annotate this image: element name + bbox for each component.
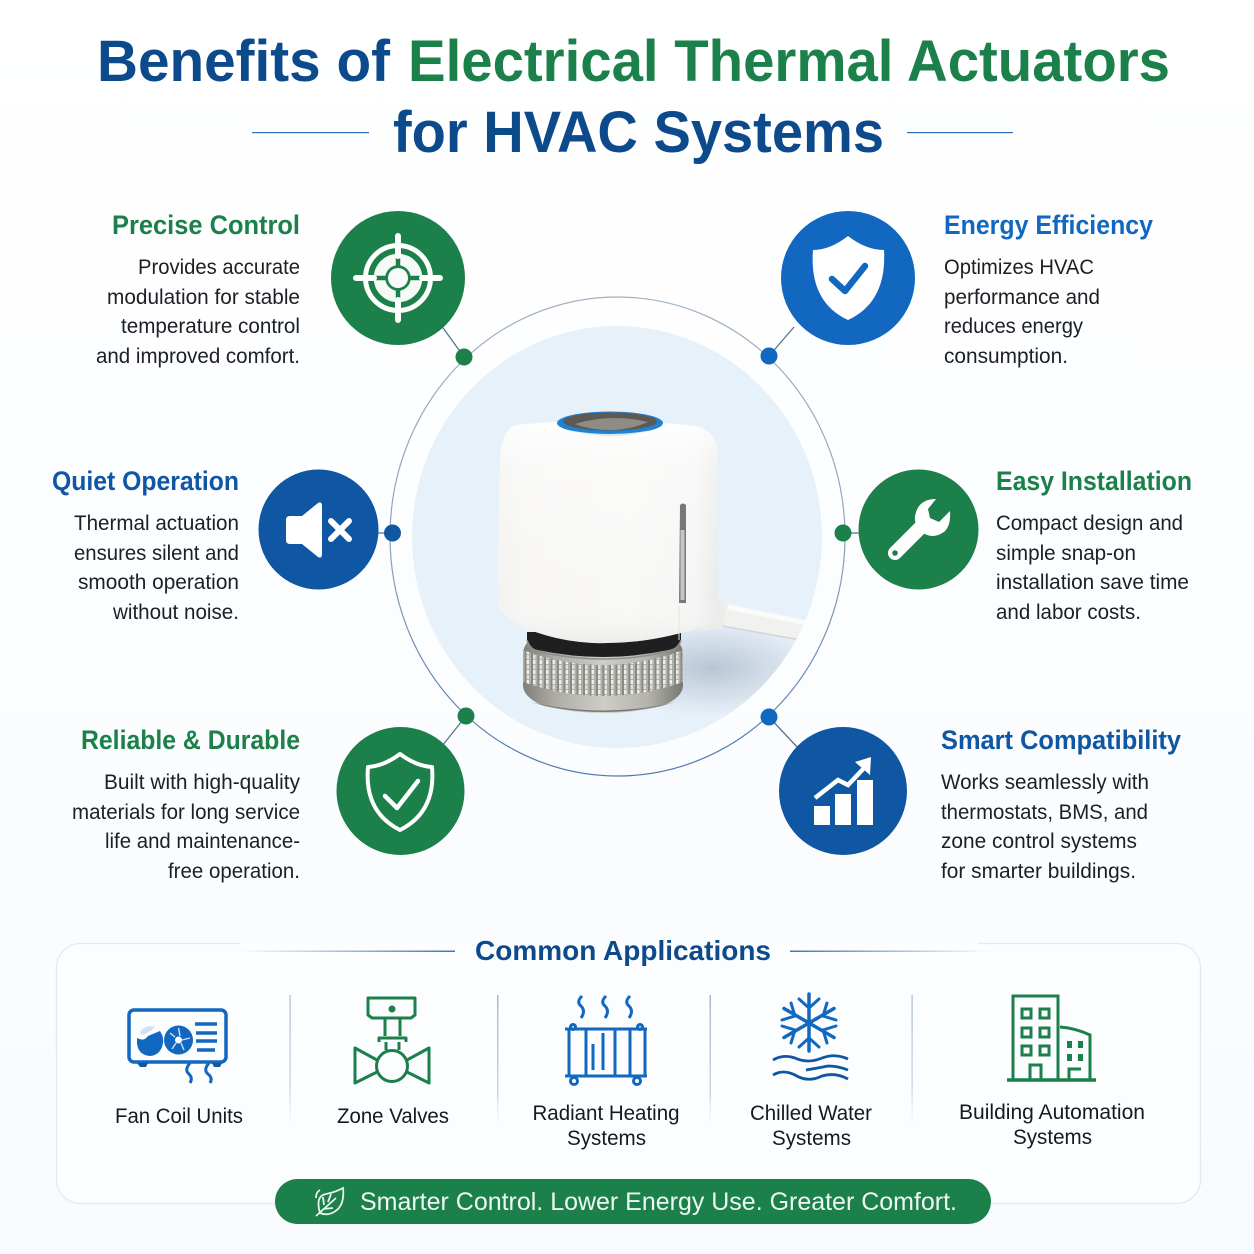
heading: common applications: Common Applications — [475, 935, 771, 966]
slogan text: Smarter Control. Lower Energy Use. Greater Comfort. — [360, 1188, 957, 1216]
application: chilled water systems — [750, 994, 872, 1150]
label: Radiant Heating — [532, 1101, 680, 1125]
text: smart compatibility description: Works seamlessly with — [941, 771, 1149, 794]
heading: smart compatibility: Smart Compatibility — [941, 725, 1181, 755]
text: quiet operation description — [74, 512, 239, 624]
text: easy installation description — [996, 512, 1189, 624]
panel: quiet operation — [52, 466, 378, 624]
heading: quiet operation: Quiet Operation — [52, 466, 239, 496]
text: precise control description: modulation for stable — [107, 286, 300, 309]
text: smart compatibility description: for smarter buildings. — [941, 860, 1136, 883]
metal lock nut — [523, 632, 683, 713]
icon: wrench — [858, 470, 978, 590]
application: zone valves — [337, 998, 449, 1128]
panel: easy installation — [858, 466, 1192, 624]
text: precise control description — [96, 256, 300, 368]
title: Benefits of — [97, 29, 391, 94]
panel: precise control — [96, 210, 465, 368]
label: Chilled Water — [750, 1101, 872, 1125]
icon: target — [331, 211, 465, 345]
text: easy installation description: simple snap-on — [996, 542, 1136, 565]
text: energy efficiency description: reduces energy — [944, 315, 1083, 338]
text: energy efficiency description — [944, 256, 1100, 368]
icon: outlined shield check — [336, 727, 464, 855]
application: radiant heating systems — [532, 996, 680, 1150]
icon: leaf — [316, 1188, 343, 1216]
text: quiet operation description: without noise. — [112, 601, 239, 624]
application: radiant heating systems: Systems — [567, 1126, 646, 1150]
text: reliable and durable description: Built with high-quality — [104, 771, 300, 794]
text: energy efficiency description: consumption. — [944, 345, 1068, 368]
application: chilled water systems: Systems — [772, 1126, 851, 1150]
panel: smart compatibility — [779, 725, 1181, 883]
text: precise control description: temperature control — [121, 315, 300, 338]
heading: precise control: Precise Control — [112, 210, 300, 240]
label: Building Automation — [959, 1100, 1145, 1124]
heading: energy efficiency: Energy Efficiency — [944, 210, 1153, 240]
central product disc — [412, 326, 822, 748]
panel: common applications — [56, 935, 1200, 1204]
icon: muted speaker — [258, 470, 378, 590]
label: Zone Valves — [337, 1104, 449, 1128]
text: reliable and durable description — [72, 771, 300, 883]
text: energy efficiency description: performance and — [944, 286, 1100, 309]
slogan banner — [275, 1179, 991, 1224]
icon: rising bar chart — [779, 727, 907, 855]
text: quiet operation description: ensures silent and — [74, 542, 239, 565]
text: reliable and durable description: free operation. — [168, 860, 300, 883]
title: for HVAC Systems — [393, 100, 884, 165]
dividers — [290, 995, 913, 1125]
text: smart compatibility description — [941, 771, 1149, 883]
icon: shield check — [781, 211, 915, 345]
panel: energy efficiency — [781, 210, 1153, 368]
text: easy installation description: and labor costs. — [996, 601, 1141, 624]
application: building automation systems: Systems — [1013, 1125, 1092, 1149]
text: reliable and durable description: life and maintenance- — [105, 830, 300, 853]
application: building automation systems — [959, 996, 1145, 1149]
text: precise control description: Provides accurate — [138, 256, 300, 279]
text: easy installation description: installation save time — [996, 571, 1189, 594]
label: Fan Coil Units — [115, 1104, 243, 1128]
text: quiet operation description: smooth operation — [78, 571, 239, 594]
text: precise control description: and improved comfort. — [96, 345, 300, 368]
text: energy efficiency description: Optimizes HVAC — [944, 256, 1094, 279]
panel: reliable and durable — [72, 725, 464, 883]
heading: reliable and durable: Reliable & Durable — [81, 725, 300, 755]
product photo: thermal actuator — [497, 412, 824, 718]
text: smart compatibility description: zone control systems — [941, 830, 1137, 853]
central ring and connectors — [378, 297, 860, 776]
text: smart compatibility description: thermostats, BMS, and — [941, 801, 1148, 824]
text: reliable and durable description: materials for long service — [72, 801, 300, 824]
text: quiet operation description: Thermal actuation — [74, 512, 239, 535]
title: Electrical Thermal Actuators — [408, 29, 1170, 94]
title — [97, 29, 1170, 165]
text: easy installation description: Compact design and — [996, 512, 1183, 535]
application: fan coil units — [115, 1010, 243, 1128]
heading: easy installation: Easy Installation — [996, 466, 1192, 496]
connector dots — [384, 348, 852, 726]
